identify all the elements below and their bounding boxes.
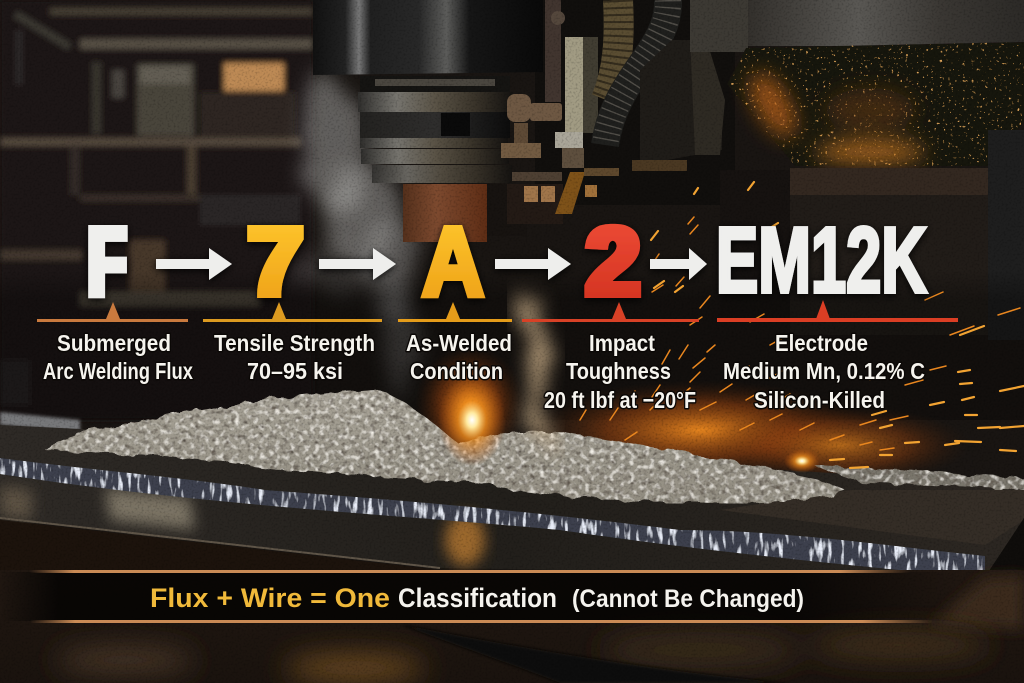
machine: bracket plates	[545, 0, 619, 214]
machine: tan corrugated hose	[606, 0, 619, 100]
label: EM12K	[723, 330, 925, 413]
label: F: Arc Welding Flux	[43, 358, 193, 384]
hopper: orange reflection	[741, 66, 925, 162]
hopper: collar	[790, 168, 995, 195]
flying sparks	[580, 182, 1024, 468]
banner: note text: (Cannot Be Changed)	[572, 585, 804, 613]
label: 2	[544, 330, 696, 413]
banner: classification text: Classification	[398, 583, 557, 613]
label: 7: 70–95 ksi	[247, 358, 343, 384]
flux pile	[45, 388, 845, 503]
orange glow behind the pile	[415, 345, 970, 485]
pointer 7	[203, 302, 382, 322]
code letter F: F	[88, 207, 126, 316]
banner: flux plus wire text: Flux + Wire = One	[150, 583, 390, 613]
pointer F	[37, 302, 188, 322]
label: EM12K: Electrode	[775, 330, 868, 356]
label: F: Submerged	[57, 330, 171, 356]
label: EM12K: Silicon-Killed	[754, 387, 885, 413]
label: A	[406, 330, 512, 384]
machine: stacked collar rings	[358, 76, 513, 183]
plate: left upper strip	[0, 412, 80, 432]
label: 2: 20 ft lbf at −20°F	[544, 387, 696, 413]
code digit 2: 2	[586, 207, 640, 316]
plate: left reflection	[0, 485, 195, 530]
label: 7: Tensile Strength	[214, 330, 375, 356]
bottom floor	[0, 570, 1024, 683]
hopper: steel band	[748, 0, 1024, 46]
hopper: lower column	[790, 195, 988, 335]
bottom banner	[0, 570, 960, 623]
pointer A	[398, 302, 512, 322]
labels	[43, 330, 925, 413]
banner: top rule	[30, 570, 910, 573]
weld bead	[0, 458, 985, 578]
welding machine head	[313, 0, 748, 242]
bracket lines and pointers	[37, 300, 958, 322]
code row: F 7 A 2 EM12K	[88, 207, 927, 316]
arrow 2	[319, 248, 396, 280]
machine: rear housing	[535, 0, 735, 205]
machine: brass fittings and bolts	[501, 94, 597, 202]
label: A: Condition	[410, 358, 503, 384]
arrow 1	[156, 248, 232, 280]
steel plate	[0, 412, 1024, 577]
code digit 7: 7	[248, 207, 303, 316]
dust plume	[523, 297, 549, 433]
pointer 2	[522, 302, 699, 322]
label: EM12K: Medium Mn, 0.12% C	[723, 358, 925, 384]
label: 2: Impact	[589, 330, 655, 356]
machine: black corrugated hose	[605, 0, 668, 145]
plate: front edge	[0, 520, 440, 570]
code wire EM12K: EM12K	[716, 208, 927, 312]
plate: right surface sheen	[720, 490, 1024, 545]
banner: dark band	[0, 572, 960, 621]
machine: copper nozzle	[403, 184, 487, 242]
label: 7	[214, 330, 375, 384]
upper right hopper	[720, 0, 1024, 340]
pointer EM12K	[717, 300, 958, 322]
code letter A: A	[422, 207, 484, 316]
smoke cloud	[288, 88, 422, 395]
arrow 4	[650, 248, 707, 280]
hopper: rusty cone	[727, 42, 1024, 166]
machine: side casting	[632, 0, 748, 171]
arrow 3	[495, 248, 571, 280]
flux trail on the right	[810, 465, 1024, 490]
welding arc flash	[438, 374, 820, 473]
label: 2: Toughness	[566, 358, 671, 384]
machine: black cylinder	[313, 0, 543, 75]
darkening behind the label band	[0, 270, 1024, 420]
banner: bottom rule	[30, 620, 935, 623]
label: A: As-Welded	[406, 330, 512, 356]
plate: orange reflection	[445, 514, 485, 566]
label: F	[43, 330, 193, 384]
plate: top surface	[0, 425, 1024, 577]
